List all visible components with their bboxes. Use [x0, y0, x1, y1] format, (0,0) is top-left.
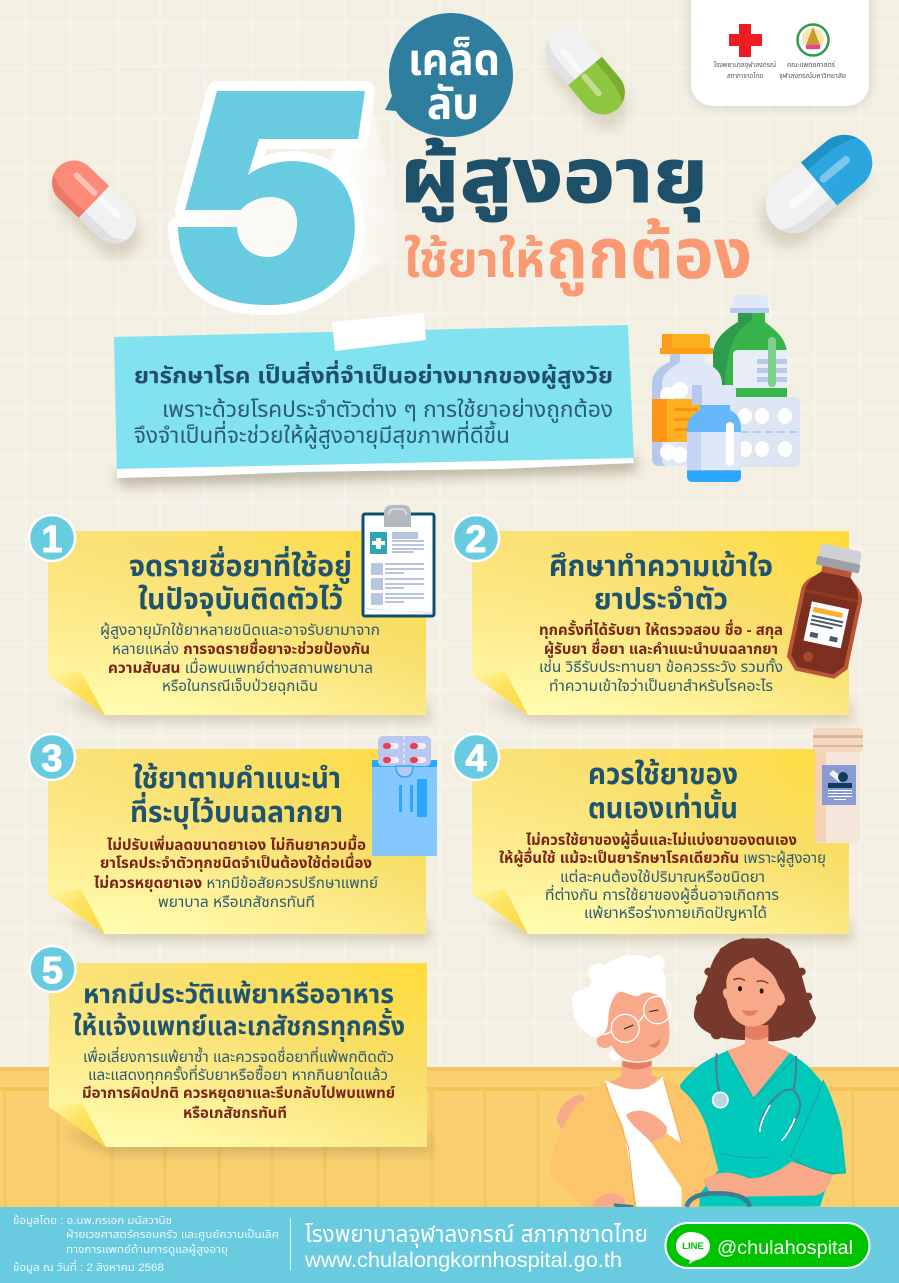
body text — [539, 619, 783, 695]
title: ใช้ยาให้ — [404, 232, 545, 288]
hospital name and url: โรงพยาบาลจุฬาลงกรณ์ สภากาชาดไทย — [305, 1221, 648, 1248]
number badge: 4 — [465, 738, 487, 780]
panel: tip 5 — [30, 946, 433, 1154]
number badge — [29, 515, 75, 561]
tape — [332, 313, 426, 351]
body text — [100, 622, 380, 695]
logo captions: คณะแพทยศาสตร์ — [787, 61, 836, 69]
credits: ข้อมูลโดย : อ.นพ.กรเอก มนัสวานิช — [13, 1215, 172, 1227]
logo captions: โรงพยาบาลจุฬาลงกรณ์ — [714, 61, 776, 70]
body text: ไม่ปรับเพิ่มลดขนาดยาเอง ไม่กินยาควบมื้อ — [107, 834, 366, 854]
body text: ผู้สูงอายุมักใช้ยาหลายชนิดและอาจรับยามาจาก — [100, 622, 380, 639]
heading: หากมีประวัติแพ้ยาหรืออาหาร — [83, 979, 394, 1009]
panel: tip 3 — [29, 734, 437, 941]
footer band — [0, 1207, 899, 1283]
body text: เพื่อเลี่ยงการแพ้ยาซ้ำ และควรจดชื่อยาที่แพ้พกติดตัว — [83, 1046, 394, 1066]
heading: ยาประจำตัว — [594, 584, 728, 616]
body text: มีอาการผิดปกติ ควรหยุดยาและรีบกลับไปพบแพทย์ — [82, 1085, 395, 1102]
intro text: จึงจำเป็นที่จะช่วยให้ผู้สูงอายุมีสุขภาพที่ดีขึ้น — [134, 420, 510, 449]
body text — [94, 834, 378, 911]
body text: ที่ต่างกัน การใช้ยาของผู้อื่นอาจเกิดการ — [545, 884, 779, 904]
number badge: 2 — [465, 519, 487, 561]
body text: หรือในกรณีเจ็บป่วยฉุกเฉิน — [162, 677, 318, 695]
intro text — [134, 360, 613, 449]
wainscot panelling — [0, 1067, 899, 1207]
heading: ให้แจ้งแพทย์และเภสัชกรทุกครั้ง — [73, 1008, 405, 1042]
fold — [49, 1103, 106, 1147]
body text: และแสดงทุกครั้งที่รับยาหรือซื้อยา หากกินยาใดแล้ว — [88, 1064, 388, 1084]
blister pack — [725, 397, 800, 467]
pill: blue — [745, 123, 889, 259]
credits: ทางการแพทย์ด้านการดูแลผู้สูงอายุ — [66, 1244, 228, 1256]
heading: ควรใช้ยาของ — [588, 759, 738, 791]
heading — [588, 759, 738, 825]
number badge — [453, 515, 499, 561]
body text: พยาบาล หรือเภสัชกรทันที — [158, 894, 315, 911]
LINE badge: LINE — [682, 1241, 704, 1252]
body text: ไม่ควรหยุดยาเอง หากมีข้อสัยควรปรึกษาแพทย์ — [94, 874, 378, 892]
number badge: 5 — [42, 950, 63, 992]
intro text: เพราะด้วยโรคประจำตัวต่าง ๆ การใช้ยาอย่างถูกต้อง — [162, 397, 613, 423]
body text: แพ้ยาหรือร่างกายเกิดปัญหาได้ — [584, 904, 767, 922]
speech bubble: เคล็ดลับ: เคล็ด — [408, 36, 500, 85]
body text: ยาโรคประจำตัวทุกชนิดจำเป็นต้องใช้ต่อเนื่อง — [100, 852, 372, 872]
small blue bottle — [687, 405, 741, 482]
pill: green — [531, 19, 643, 138]
logo captions: สภากาชาดไทย — [727, 72, 763, 80]
body text: ความสับสน เมื่อพบแพทย์ต่างสถานพยาบาล — [108, 657, 373, 677]
number badge: 1 — [41, 519, 63, 561]
logo card — [691, 0, 869, 106]
logo captions: จุฬาลงกรณ์มหาวิทยาลัย — [779, 72, 846, 81]
speech bubble: เคล็ดลับ — [385, 13, 513, 137]
heading: จดรายชื่อยาที่ใช้อยู่ — [129, 545, 352, 584]
icon: faculty crest — [798, 24, 828, 56]
icon: blister pack in pouch — [372, 736, 437, 856]
icon: clipboard — [363, 505, 434, 616]
pill: red — [37, 151, 154, 267]
elderly patient — [549, 955, 750, 1207]
body text: เช่น วิธีรับประทานยา ข้อควรระวัง รวมทั้ง — [539, 657, 783, 676]
number badge — [29, 734, 75, 780]
title: ถูกต้อง — [546, 215, 752, 296]
logo captions — [714, 61, 846, 81]
heading — [73, 979, 405, 1042]
heading: ที่ระบุไว้บนฉลากยา — [130, 791, 343, 829]
big numeral 5 — [178, 88, 405, 312]
heading: ในปัจจุบันติดตัวไว้ — [138, 584, 343, 616]
body text — [82, 1046, 395, 1122]
intro text: ยารักษาโรค เป็นสิ่งที่จำเป็นอย่างมากของผู้สูงวัย — [134, 360, 613, 389]
panel: tip 2 — [453, 515, 872, 722]
icon: medicine bottles — [652, 295, 800, 482]
icon: medicine jar — [813, 728, 863, 843]
title — [400, 134, 752, 296]
body text — [499, 829, 826, 922]
fold — [472, 671, 528, 715]
orange bottle — [652, 353, 722, 466]
panel: intro note — [114, 313, 636, 486]
heading — [130, 763, 343, 829]
icon: brown medicine bottle — [784, 541, 872, 681]
fold — [48, 889, 105, 934]
credits: ข้อมูล ณ วันที่ : 2 สิงหาคม 2568 — [13, 1259, 164, 1274]
number badge: 3 — [41, 738, 63, 780]
heading: ตนเองเท่านั้น — [588, 788, 738, 825]
fold — [472, 889, 528, 934]
title: ผู้สูงอายุ — [400, 134, 708, 222]
nurse — [680, 938, 846, 1207]
heading — [549, 551, 773, 616]
panel: tip 1 — [29, 505, 434, 722]
speech bubble: เคล็ดลับ: ลับ — [427, 80, 479, 129]
body text: หลายแหล่ง การจดรายชื่อยาจะช่วยป้องกัน — [112, 638, 370, 658]
green bottle — [713, 312, 787, 398]
hospital name and url — [304, 1221, 648, 1272]
number badge — [453, 734, 499, 780]
credits — [13, 1215, 279, 1274]
body text: หรือเภสัชกรทันที — [183, 1105, 287, 1122]
credits: ฝ่ายเวชศาสตร์ครอบครัว และศูนย์ความเป็นเลิศ — [66, 1228, 279, 1241]
heading: ใช้ยาตามคำแนะนำ — [133, 763, 341, 795]
icon: red cross — [729, 24, 762, 57]
body text: ทำความเข้าใจว่าเป็นยาสำหรับโรคอะไร — [549, 677, 773, 695]
illustration: nurse and elderly patient — [549, 938, 846, 1207]
body text: ผู้รับยา ชื่อยา และคำแนะนำบนฉลากยา — [544, 638, 778, 659]
heading — [129, 545, 352, 616]
fold — [48, 671, 105, 715]
body text: ไม่ควรใช้ยาของผู้อื่นและไม่แบ่งยาของตนเอง — [526, 829, 797, 850]
body text: ทุกครั้งที่ได้รับยา ให้ตรวจสอบ ชื่อ - สกุล — [539, 619, 783, 639]
LINE badge: @chulahospital — [717, 1238, 853, 1259]
body text: แต่ละคนต้องใช้ปริมาณหรือชนิดยา — [560, 868, 765, 886]
heading: ศึกษาทำความเข้าใจ — [549, 551, 773, 583]
body text: ให้ผู้อื่นใช้ แม้จะเป็นยารักษาโรคเดียวกัน เพราะผู้สูงอายุ — [499, 847, 826, 868]
number badge — [30, 946, 76, 992]
panel: tip 4 — [453, 728, 863, 941]
hospital name and url: www.chulalongkornhospital.go.th — [304, 1249, 622, 1272]
LINE badge — [666, 1223, 870, 1268]
